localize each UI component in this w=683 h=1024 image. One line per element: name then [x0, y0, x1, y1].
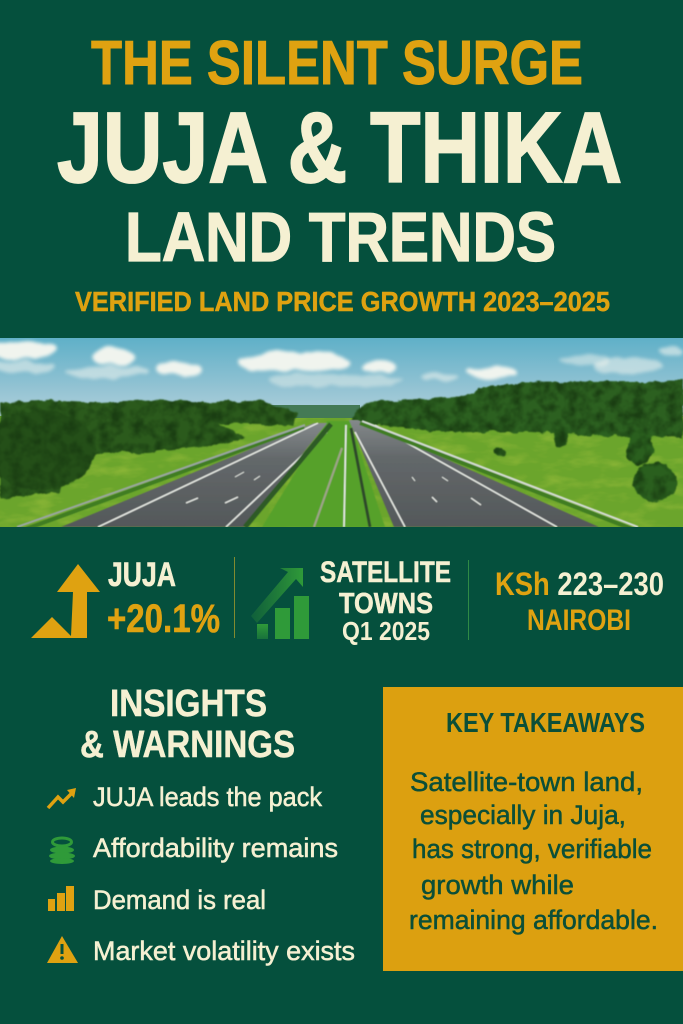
far tree line [270, 405, 360, 418]
stat: satellite towns [251, 556, 451, 646]
insights heading: & WARNINGS [80, 724, 295, 766]
insights heading [80, 683, 295, 766]
juja percentage: +20.1% [107, 597, 220, 641]
title line: the silent surge: THE SILENT SURGE [91, 29, 583, 98]
takeaways body text: Satellite-town land, [410, 767, 643, 797]
takeaways heading: KEY TAKEAWAYS [446, 707, 645, 738]
stat: juja growth [31, 556, 220, 641]
nairobi label: NAIROBI [527, 604, 631, 637]
median grass [262, 421, 385, 527]
guard rails [17, 421, 638, 529]
item: demand: Demand is real [93, 885, 266, 915]
item: juja leads: JUJA leads the pack [93, 782, 322, 812]
left trees [0, 400, 298, 499]
stat: satellite towns: Q1 2025 [342, 616, 430, 646]
stat: satellite towns: TOWNS [339, 588, 433, 620]
title block [57, 29, 622, 317]
panel: key takeaways [383, 687, 683, 971]
right trees [352, 381, 683, 501]
satellite towns label: SATELLITE [320, 556, 451, 589]
item: affordability: Affordability remains [93, 833, 338, 863]
icon: warning triangle [47, 936, 78, 963]
icon: gold up arrow [31, 564, 100, 638]
takeaways body text: especially in Juja, [420, 800, 626, 830]
icon: small bar chart [48, 886, 74, 911]
takeaways body text: remaining affordable. [409, 905, 658, 935]
item: market volatility: Market volatility exists [93, 936, 355, 966]
icon: coin stack [49, 838, 75, 864]
price range: KSh 223–230 [495, 566, 664, 602]
ground [0, 416, 683, 528]
icon: zigzag trend arrow [48, 788, 76, 808]
takeaways body text: growth while [421, 870, 574, 900]
juja label: JUJA [108, 556, 176, 594]
left carriageway [61, 423, 327, 527]
right carriageway [349, 420, 599, 527]
road lines [98, 423, 557, 527]
panel: insights and warnings [47, 683, 355, 966]
subtitle: VERIFIED LAND PRICE GROWTH 2023–2025 [75, 286, 610, 317]
title line: land trends: LAND TRENDS [125, 198, 556, 276]
icon: green bar chart with arrow [251, 568, 309, 639]
takeaways body text [409, 767, 658, 935]
insights heading: INSIGHTS [110, 683, 267, 725]
highway photo illustration [0, 338, 683, 529]
takeaways body text: has strong, verifiable [412, 834, 652, 864]
stat: nairobi price [495, 566, 664, 637]
